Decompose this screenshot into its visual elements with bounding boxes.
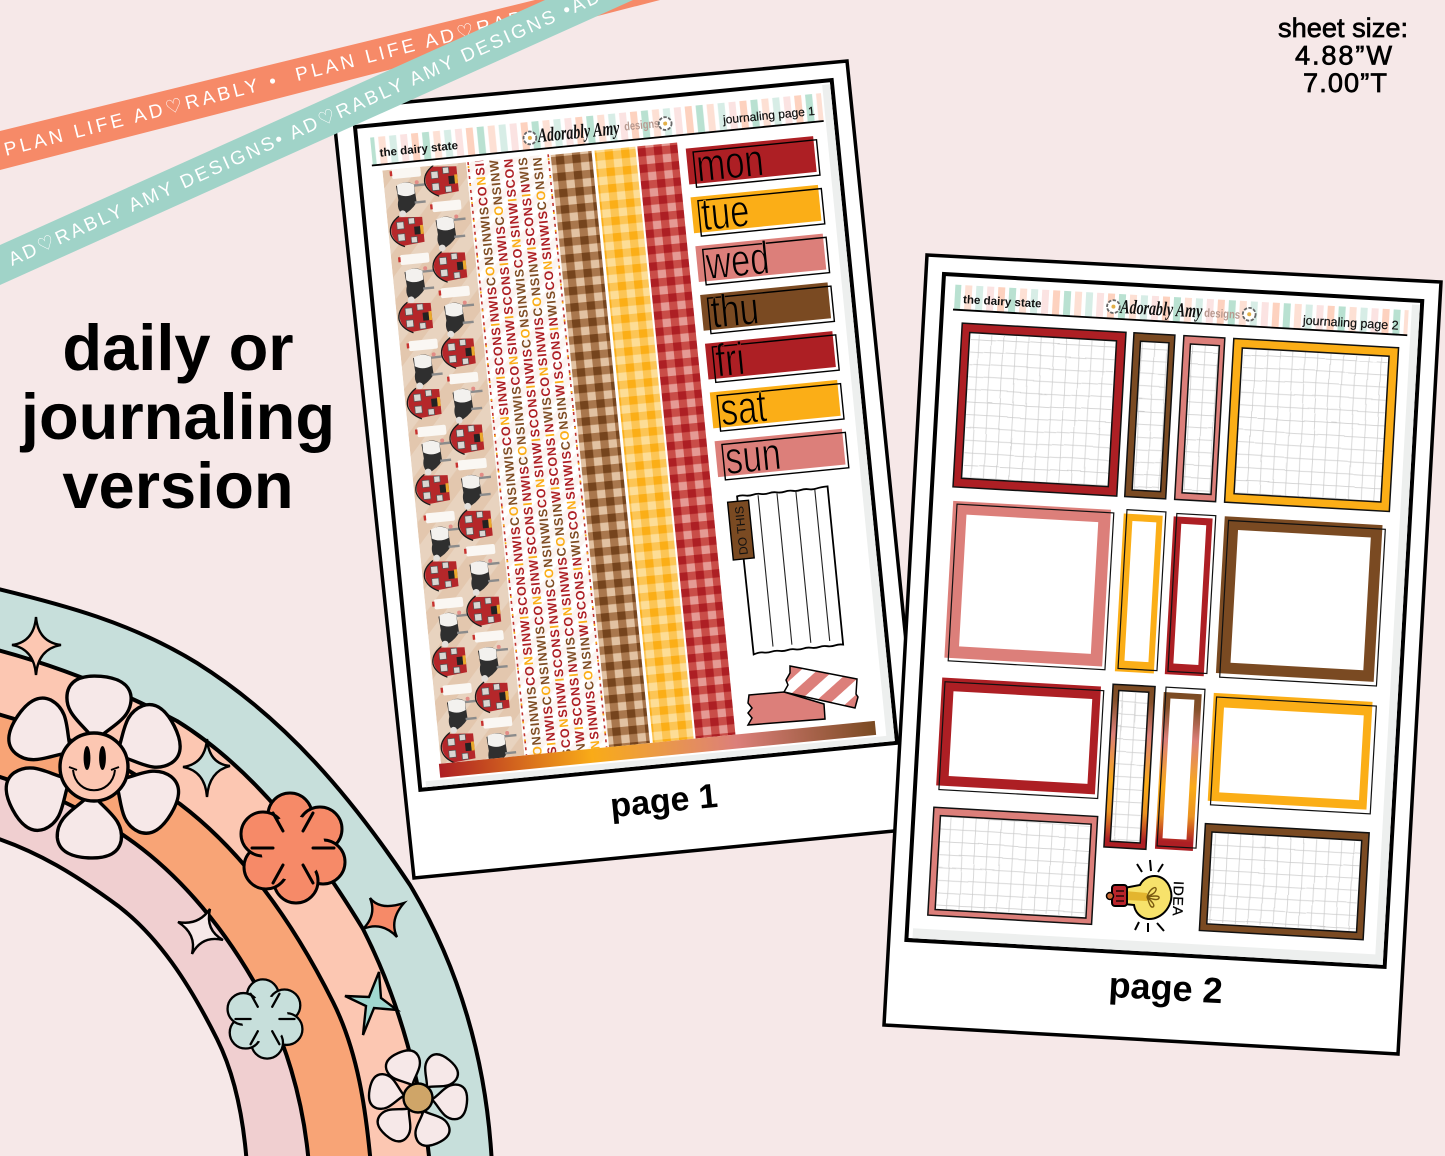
title: daily or journaling version: daily or — [62, 311, 294, 384]
icon: teal flower — [228, 979, 302, 1059]
icon: smiley flower — [0, 674, 189, 860]
icon: daisy — [367, 1046, 469, 1150]
day label: sat — [709, 372, 844, 436]
card outline — [333, 61, 925, 878]
page 1 label: page 1 — [608, 777, 719, 825]
icon: orange flower — [241, 793, 345, 903]
icon: white sparkle — [178, 909, 223, 954]
pink band — [0, 774, 309, 1156]
gradient grid column — [1104, 684, 1155, 849]
day label: mon: mon — [694, 133, 766, 192]
day label: wed: wed — [703, 231, 772, 289]
brown gingham strip — [551, 151, 650, 747]
peach band — [0, 648, 430, 1156]
day label: sat: sat — [718, 379, 769, 436]
icon: peach sparkle — [12, 617, 61, 675]
amber grid box — [1225, 338, 1399, 511]
logo: Adorably Amy — [1118, 296, 1203, 323]
sheet size note: 4.88”W — [1295, 40, 1392, 70]
sheet size note: 7.00”T — [1303, 67, 1387, 98]
day label: tue — [690, 177, 825, 241]
header strip — [953, 285, 1409, 335]
striped washi — [784, 666, 858, 708]
sheet shadow — [912, 278, 1420, 965]
day label: fri — [704, 323, 840, 388]
icon: idea light bulb — [1106, 860, 1187, 932]
page label: journaling page 1 — [721, 104, 816, 127]
day label: sun: sun — [723, 427, 783, 484]
brown grid box lower — [1199, 824, 1369, 940]
cow barn milk washi strip — [382, 162, 525, 773]
day label: tue: tue — [699, 184, 752, 241]
gradient blank column — [1155, 687, 1205, 851]
day label: sun — [714, 421, 849, 485]
wisconsin text strip: WISCONSINWISCONSINWISCONSINWISCONSINWISCONSINWISCONSINWISCONSINWISCONSINWISCONSIN — [510, 102, 595, 823]
red grid box — [953, 323, 1126, 496]
brown blank box — [1216, 516, 1386, 686]
icon: orange sparkle — [363, 898, 404, 937]
header strip — [369, 93, 824, 166]
page 2 label: page 2 — [1108, 964, 1224, 1011]
amber blank column — [1115, 510, 1166, 674]
brown grid column — [1125, 333, 1175, 499]
sheet frame — [355, 80, 897, 790]
red blank column — [1165, 513, 1216, 676]
day label: thu: thu — [708, 282, 761, 338]
do this tab: DO THIS — [732, 505, 751, 556]
sticker sheet page 2 — [906, 274, 1422, 967]
sheet theme label: the dairy state — [963, 294, 1042, 311]
title: daily or journaling version: journaling — [19, 380, 335, 453]
sheet size note: sheet size: — [1278, 12, 1408, 43]
logo: designs — [1204, 306, 1241, 322]
title: daily or journaling version — [19, 311, 335, 522]
teal band — [0, 587, 492, 1156]
title: daily or journaling version: version — [62, 449, 294, 522]
day label: mon — [685, 128, 820, 193]
salmon grid box — [928, 807, 1098, 924]
do this tab — [728, 500, 754, 560]
salmon grid column — [1175, 336, 1225, 502]
logo: Adorably Amy — [535, 117, 621, 147]
washi tape doodles — [748, 666, 858, 725]
day label: fri: fri — [713, 332, 747, 387]
idea label: IDEA — [1170, 881, 1187, 917]
card outline — [884, 255, 1441, 1054]
do this checklist — [727, 486, 843, 656]
wisconsin text strip: WISCONSINWISCONSINWISCONSINWISCONSINWISCONSINWISCONSINWISCONSINWISCONSIN — [499, 134, 576, 775]
wisconsin text strip — [466, 154, 609, 756]
wisconsin text strip: WISCONSINWISCONSINWISCONSINWISCONSINWISCONSINWISCONSINWISCONSINWISCONSIN — [472, 152, 549, 793]
sheet theme label: the dairy state — [379, 139, 459, 160]
sheet frame — [906, 274, 1422, 967]
smiley face — [60, 733, 128, 801]
day label: thu — [699, 274, 835, 339]
red gingham strip — [637, 142, 735, 739]
inner band edge — [0, 836, 247, 1156]
page label: journaling page 2 — [1302, 313, 1399, 333]
gradient bar — [439, 721, 876, 778]
sticker sheet page 1 — [353, 58, 902, 839]
salmon blank box — [944, 501, 1114, 670]
salmon washi — [748, 692, 825, 725]
amber blank box lower — [1207, 693, 1377, 814]
rainbow — [0, 587, 492, 1156]
sheet size note — [1278, 12, 1408, 98]
icon: teal star — [345, 972, 397, 1035]
orange band — [0, 712, 371, 1156]
day label: wed — [695, 226, 830, 290]
page 2 polaroid card — [884, 255, 1441, 1054]
page 1 polaroid card — [333, 58, 925, 878]
red blank box — [936, 678, 1104, 798]
amber gingham strip — [594, 147, 694, 743]
sheet shadow — [361, 84, 895, 787]
logo: designs — [624, 116, 660, 134]
icon: teal sparkle — [183, 739, 230, 797]
wisconsin text strip: WISCONSINWISCONSINWISCONSINWISCONSINWISCONSINWISCONSINWISCONSINWISCONSIN — [530, 156, 607, 797]
wisconsin text strip: WISCONSINWISCONSINWISCONSINWISCONSINWISCONSINWISCONSINWISCONSINWISCONSINWISCONSIN — [480, 91, 565, 812]
